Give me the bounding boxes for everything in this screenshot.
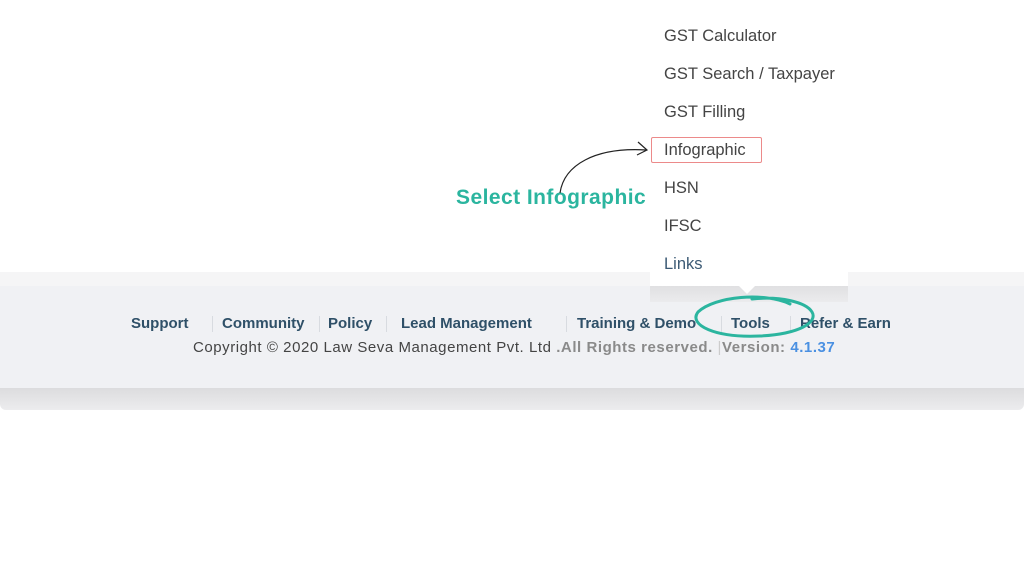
menu item: HSN: HSN [664,179,699,197]
highlight box: Infographic [651,137,762,163]
menu item: IFSC: IFSC [664,217,702,235]
footer links: Policy [328,315,372,332]
footer links: Training & Demo [577,315,696,332]
menu item: Infographic: Infographic [664,141,746,159]
circle around Tools [694,296,815,338]
menu item: GST Search: GST Search / Taxpayer [664,65,835,83]
footer links: Refer & Earn [800,315,891,332]
footer links: Tools [731,315,770,332]
footer links: Lead Management [401,315,532,332]
footer links [131,315,891,332]
arrow [559,142,648,194]
menu item: GST Filling: GST Filling [664,103,745,121]
callout: Select Infographic: Select Infographic [456,186,646,209]
menu item: GST Calculator: GST Calculator [664,27,776,45]
copyright line: Copyright © 2020 Law Seva Management Pvt. Ltd .All Rights reserved. |Version: 4.1.37 [193,339,835,356]
dropdown menu [650,272,848,300]
footer links: Support [131,315,188,332]
menu item: Links: Links [664,255,703,273]
footer links: Community [222,315,304,332]
footer band [0,272,1024,410]
